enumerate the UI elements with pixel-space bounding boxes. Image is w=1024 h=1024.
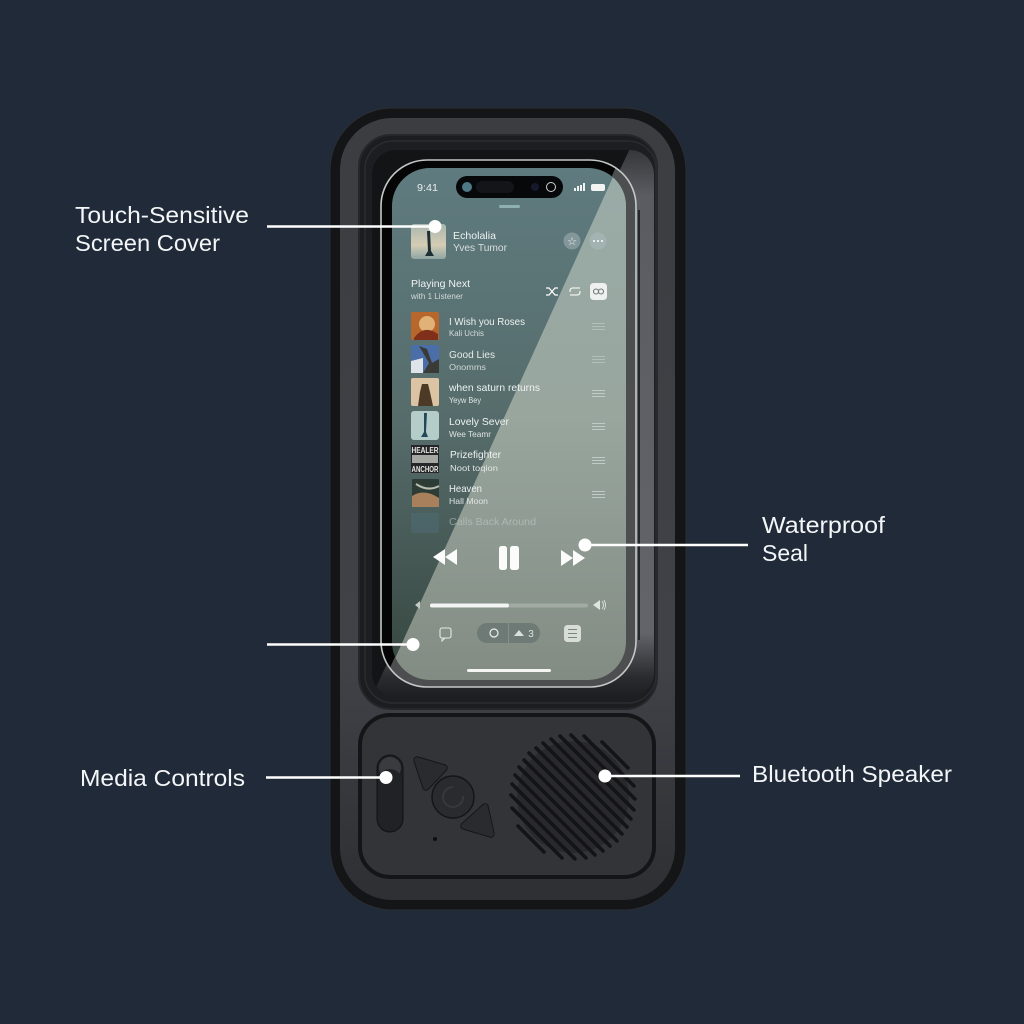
track: Good Lies: Onomms [449,362,486,372]
callout: touch-sensitive screen cover [75,202,442,256]
playing next header [410,278,607,301]
track title: Echolalia [453,230,496,242]
track: Lovely Sever [411,411,605,440]
microphone hole [433,837,437,841]
favourite button [564,232,580,250]
case inner rim [340,118,675,900]
previous triangle button [417,760,444,787]
track: I Wish you Roses: I Wish you Roses [449,316,525,328]
leader line [266,776,386,779]
callout: unlabeled pointer [267,638,420,651]
dynamic island [456,176,563,198]
track: Heaven [412,479,605,507]
status time: 9:41 [417,182,438,194]
track: Prizefighter [411,445,605,474]
now playing row [411,224,606,259]
bottom control panel [360,715,654,877]
next triangle button [464,807,491,834]
label: Touch-Sensitive [75,202,249,228]
callout: waterproof seal: Seal [762,540,808,566]
playing next header: Playing Next [411,278,470,290]
track: Lovely Sever: Lovely Sever [449,416,509,428]
repeat icon [570,288,580,295]
track: Lovely Sever: Wee Teamr [449,429,491,439]
track: I Wish you Roses [411,312,605,340]
phone screen [392,168,626,680]
bezel glare [380,158,640,690]
pause icon [499,546,519,570]
favourite button: ☆ [567,236,577,248]
dark seam beside phone [638,210,640,640]
track: Good Lies: Good Lies [449,349,495,361]
power button [432,776,474,818]
playing next header: with 1 Listener [410,291,463,301]
infinity button [590,283,607,300]
album art: Echolalia [411,224,446,259]
screen window recess [359,135,660,709]
callout: waterproof seal [578,512,886,566]
recess glare [370,140,660,700]
volume slider switch [377,755,403,832]
track: Prizefighter: ANCHOR [412,465,439,474]
sheet grabber [499,205,520,208]
leader line [267,225,435,228]
track: Prizefighter: Noot toqion [450,463,498,473]
label: Media Controls [80,765,245,791]
track: when saturn returns [411,378,605,406]
callout: touch-sensitive screen cover: Screen Cover [75,230,220,256]
volume slider [415,600,606,610]
track: Calls Back Around (faded): Calls Back Around [449,516,536,528]
track: Heaven: Hall Moon [449,496,488,506]
callout: bluetooth speaker [598,761,952,787]
label: Waterproof [762,512,886,538]
leader line [585,544,748,546]
bottom toolbar [440,623,581,643]
lyrics icon [440,628,451,641]
phone body [381,160,636,687]
queue icon [564,625,581,642]
callout: media controls [80,765,392,791]
more button [590,232,606,250]
track: Prizefighter: Prizefighter [450,449,501,461]
leader line [605,775,740,777]
status icons [574,183,605,191]
case outer shell [330,108,686,910]
rewind icon [433,549,457,565]
home indicator [467,669,551,672]
airplay pill: 3 [528,629,534,640]
track: when saturn returns: Yeyw Bey [449,395,482,405]
track: Prizefighter: HEALER [412,446,439,455]
label: Bluetooth Speaker [752,761,952,787]
playback controls [433,546,585,570]
track: Calls Back Around (faded) [411,513,536,533]
track: Good Lies [411,345,605,373]
track: I Wish you Roses: Kali Uchis [449,328,484,338]
phone outline [381,160,636,687]
phone [380,140,640,690]
shuffle icon [546,288,558,295]
track: Heaven: Heaven [449,483,482,495]
track: when saturn returns: when saturn returns [448,382,540,394]
airplay pill [477,623,540,643]
device: waterproof phone case [330,108,686,910]
speaker grille [511,735,635,859]
fast forward icon [561,550,585,566]
queue list [411,312,605,533]
track artist: Yves Tumor [453,243,508,254]
